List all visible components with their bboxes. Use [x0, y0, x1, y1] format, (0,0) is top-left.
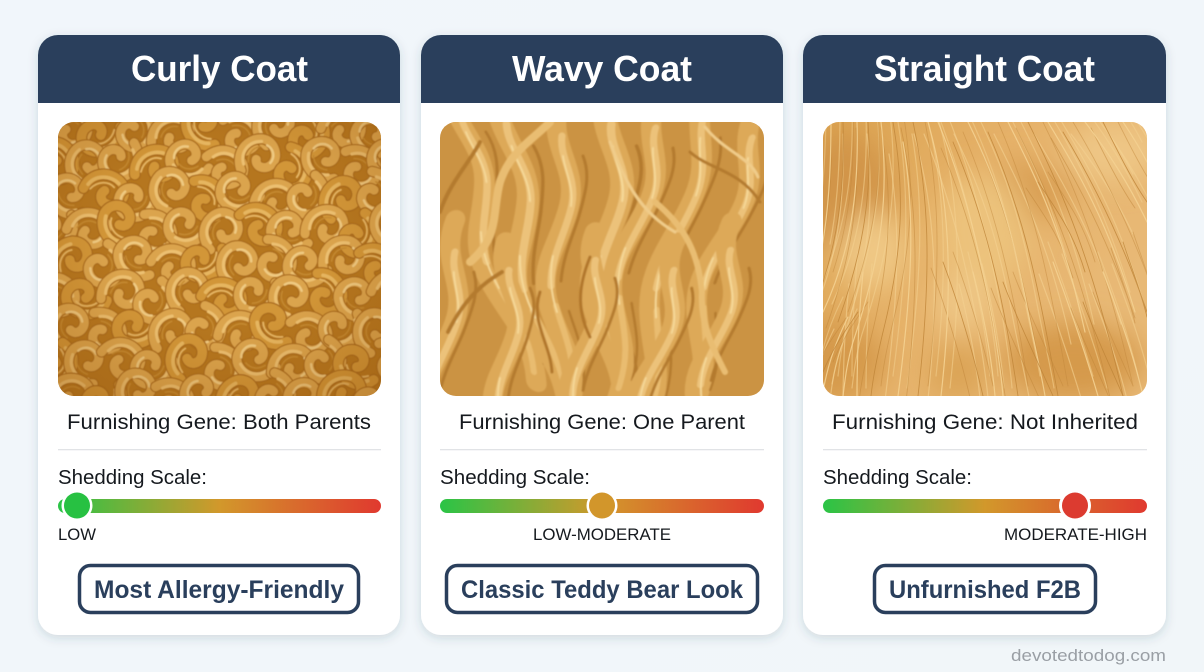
badge: unfurnished f2b: Unfurnished F2B — [889, 576, 1081, 604]
heading: curly coat: Curly Coat — [131, 48, 308, 89]
text: furnishing gene: Furnishing Gene: One Parent — [459, 411, 745, 434]
badge: classic teddy bear look — [446, 566, 758, 612]
card: curly — [38, 35, 400, 635]
text: shedding scale label: Shedding Scale: — [823, 467, 972, 489]
text: furnishing gene: Furnishing Gene: Not Inherited — [832, 411, 1138, 434]
badge: classic teddy bear look: Classic Teddy Bear Look — [461, 576, 743, 604]
image: straight fur — [823, 122, 1147, 396]
card: straight — [803, 35, 1166, 635]
shedding bar — [58, 499, 381, 513]
footer: site credit: devotedtodog.com — [1011, 646, 1166, 665]
marker: moderate-high — [1059, 490, 1091, 522]
marker: low-moderate — [586, 490, 618, 521]
heading: wavy coat: Wavy Coat — [512, 48, 692, 89]
level label: LOW-MODERATE — [533, 525, 671, 544]
shedding bar — [440, 499, 764, 513]
marker: low — [62, 490, 92, 521]
header: wavy — [421, 35, 783, 103]
badge: most allergy-friendly: Most Allergy-Friendly — [94, 576, 344, 604]
image: wavy fur — [440, 122, 764, 396]
panel: straight coat — [776, 35, 1166, 635]
panel: wavy coat — [410, 35, 785, 635]
shedding bar — [823, 499, 1147, 513]
text: furnishing gene: Furnishing Gene: Both Parents — [67, 411, 371, 434]
card: wavy — [421, 35, 783, 635]
text: shedding scale label: Shedding Scale: — [440, 467, 590, 489]
heading: straight coat: Straight Coat — [874, 48, 1095, 89]
level label: MODERATE-HIGH — [1004, 525, 1147, 544]
panel: curly coat — [33, 35, 417, 635]
badge: unfurnished f2b — [874, 566, 1096, 612]
header: curly — [38, 35, 400, 103]
header: straight — [803, 35, 1166, 103]
level label: LOW — [58, 525, 96, 544]
image: curly fur — [58, 122, 381, 396]
text: shedding scale label: Shedding Scale: — [58, 467, 207, 489]
badge: most allergy-friendly — [80, 566, 358, 612]
